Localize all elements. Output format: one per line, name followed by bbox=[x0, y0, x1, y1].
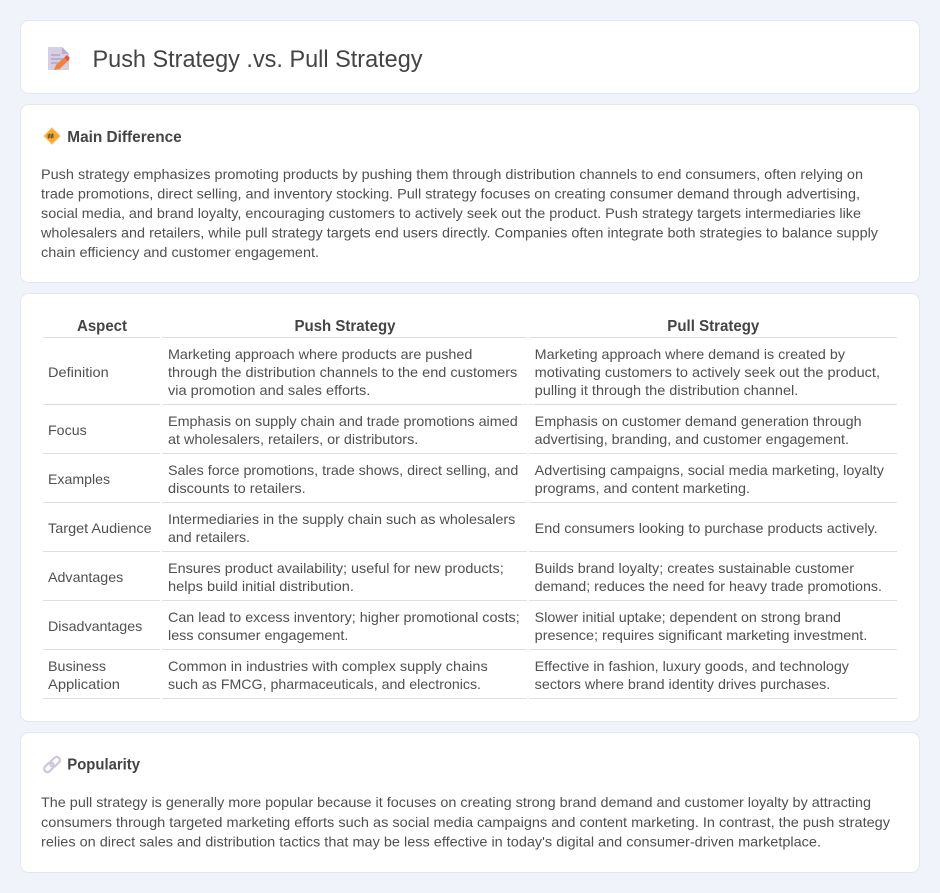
table row: target audience: Intermediaries in the supply chain such as wholesalers bbox=[168, 511, 515, 527]
table row: examples: Sales force promotions, trade shows, direct selling, and bbox=[168, 462, 518, 478]
table row: target audience: and retailers. bbox=[168, 529, 250, 545]
table row: advantages: Advantages bbox=[48, 569, 123, 585]
table row: focus: Emphasis on supply chain and trade promotions aimed bbox=[168, 413, 518, 429]
text block: popularity: consumers through targeted marketing efforts such as social media campaigns and content marketing. In contrast, the push strategy bbox=[41, 814, 890, 830]
table row: focus: at wholesalers, retailers, or distributors. bbox=[168, 431, 418, 447]
table row: definition: Definition bbox=[48, 364, 109, 380]
table row: definition: through the distribution channels to the end customers bbox=[168, 364, 517, 380]
table row: business application: Effective in fashion, luxury goods, and technology bbox=[535, 658, 849, 674]
table row: focus bbox=[43, 413, 897, 454]
table row: business application: Application bbox=[48, 676, 120, 692]
table row: disadvantages: less consumer engagement. bbox=[168, 627, 348, 643]
table row: advantages: Ensures product availability; useful for new products; bbox=[168, 560, 504, 576]
icon: warning diamond bbox=[44, 128, 60, 144]
panel: comparison table bbox=[20, 294, 920, 722]
table row: examples: Examples bbox=[48, 471, 110, 487]
title: Push Strategy .vs. Pull Strategy bbox=[92, 46, 422, 73]
table row: examples: programs, and content marketing. bbox=[535, 480, 750, 496]
table row: focus: Emphasis on customer demand generation through bbox=[535, 413, 862, 429]
table row: examples bbox=[43, 462, 897, 503]
table row: target audience: End consumers looking to purchase products actively. bbox=[535, 520, 878, 536]
table header row: Aspect bbox=[77, 318, 128, 335]
heading: main difference: Main Difference bbox=[67, 129, 182, 146]
table row: target audience: Target Audience bbox=[48, 520, 152, 536]
table header row bbox=[43, 318, 897, 338]
table row: definition bbox=[43, 346, 897, 405]
table row: business application: Business bbox=[48, 658, 106, 674]
table row: definition: via promotion and sales efforts. bbox=[168, 382, 370, 398]
table row: disadvantages: Slower initial uptake; dependent on strong brand bbox=[535, 609, 841, 625]
table row: advantages bbox=[43, 560, 897, 601]
table row: definition: motivating customers to actively seek out the product, bbox=[535, 364, 880, 380]
table row: advantages: Builds brand loyalty; creates sustainable customer bbox=[535, 560, 854, 576]
icon: chain link bbox=[43, 756, 61, 773]
table row: definition: Marketing approach where products are pushed bbox=[168, 346, 472, 362]
table row: definition: Marketing approach where demand is created by bbox=[535, 346, 845, 362]
table row: business application bbox=[43, 658, 897, 699]
table row: target audience bbox=[43, 511, 897, 552]
table row: business application: sectors where brand identity drives purchases. bbox=[535, 676, 830, 692]
table row: examples: Advertising campaigns, social media marketing, loyalty bbox=[535, 462, 884, 478]
table row: focus: Focus bbox=[48, 422, 87, 438]
panel: main difference bbox=[20, 104, 920, 282]
text block: popularity bbox=[41, 794, 890, 850]
text block: main difference bbox=[40, 166, 878, 260]
table row: examples: discounts to retailers. bbox=[168, 480, 306, 496]
table header row: Push Strategy bbox=[294, 318, 396, 335]
text block: main difference: Push strategy emphasizes promoting products by pushing them through distribution channels to end consumers, often relying on bbox=[41, 166, 863, 182]
table row: advantages: helps build initial distribution. bbox=[168, 578, 354, 594]
text block: main difference: chain efficiency and customer engagement. bbox=[41, 244, 319, 260]
panel: popularity bbox=[20, 732, 920, 872]
heading: popularity: Popularity bbox=[67, 756, 140, 774]
table header row: Pull Strategy bbox=[667, 318, 759, 335]
text block: main difference: trade promotions, direct selling, and inventory stocking. Pull strategy focuses on creating consumer demand through advertising, bbox=[41, 186, 860, 202]
text block: main difference: wholesalers and retailers, while pull strategy targets end users directly. Companies often integrate both strategies to balance supply bbox=[40, 224, 878, 240]
table row: business application: such as FMCG, pharmaceuticals, and electronics. bbox=[168, 676, 481, 692]
table row: disadvantages: Disadvantages bbox=[48, 618, 142, 634]
table row: business application: Common in industries with complex supply chains bbox=[168, 658, 488, 674]
table row: disadvantages: Can lead to excess inventory; higher promotional costs; bbox=[168, 609, 520, 625]
table row: advantages: demand; reduces the need for heavy trade promotions. bbox=[535, 578, 882, 594]
table row: definition: pulling it through the distribution channel. bbox=[535, 382, 798, 398]
table row: disadvantages: presence; requires significant marketing investment. bbox=[535, 627, 867, 643]
icon: memo with pencil bbox=[48, 47, 70, 70]
table row: disadvantages bbox=[43, 609, 897, 650]
text block: popularity: relies on direct sales and distribution tactics that may be less effective in today's digital and consumer-driven marketplace. bbox=[41, 834, 821, 850]
text block: main difference: social media, and brand loyalty, encouraging customers to actively seek out the product. Push strategy targets intermediaries like bbox=[41, 205, 861, 221]
panel: title card bbox=[20, 20, 920, 94]
table row: focus: advertising, branding, and customer engagement. bbox=[535, 431, 849, 447]
text block: popularity: The pull strategy is generally more popular because it focuses on creating strong brand demand and customer loyalty by attracting bbox=[41, 794, 871, 810]
